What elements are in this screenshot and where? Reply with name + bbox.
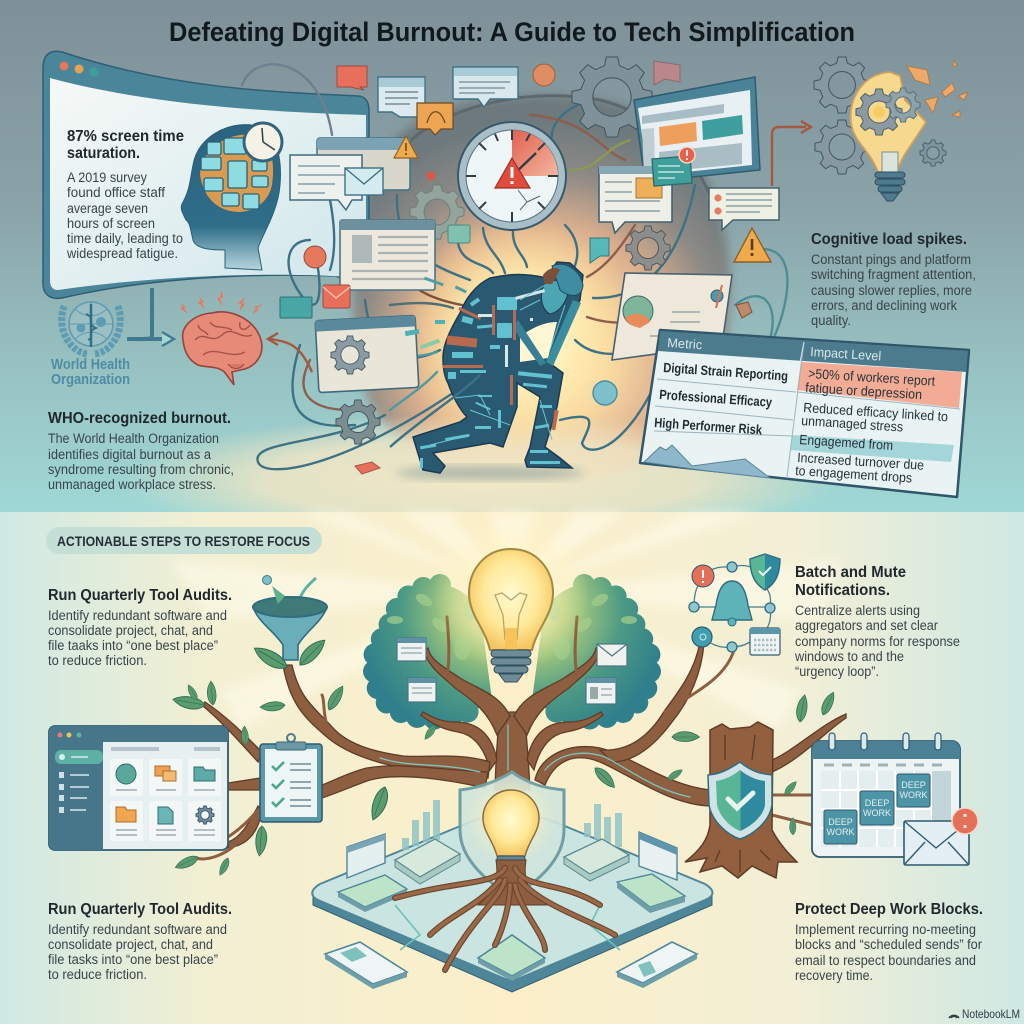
WHO wordmark: Organization — [51, 371, 130, 388]
background: warm ground glow — [120, 414, 840, 546]
browser monitor — [634, 77, 760, 182]
head — [541, 280, 568, 314]
heading and text: WHO-recognized burnout: WHO-recognized burnout. — [48, 410, 231, 427]
icon: funnel — [253, 576, 327, 660]
WHO wordmark: World Health — [51, 356, 130, 373]
table text: fatigue or depression — [805, 380, 923, 402]
table text: Metric — [667, 335, 703, 352]
alert badge — [952, 808, 978, 834]
table text: to engagement drops — [795, 463, 913, 486]
heading and text: run quarterly tool audits (top): consolidate project, chat, and — [48, 623, 213, 638]
table text: Increased turnover due — [797, 450, 924, 473]
shield with check — [708, 762, 772, 839]
mountain mini chart — [644, 445, 770, 478]
icon: deep work calendar with envelope: WORK — [900, 790, 928, 800]
illustration: isometric platform — [312, 814, 712, 992]
red cell — [797, 362, 962, 408]
platform cards — [325, 832, 697, 989]
figure shadow — [395, 466, 585, 480]
heading and text: batch and mute notifications: “urgency loop”. — [795, 664, 879, 679]
heading and text: protect deep work blocks — [795, 901, 983, 983]
red node — [426, 172, 436, 180]
wire crossing figure — [390, 375, 480, 447]
filament — [882, 152, 898, 172]
icon: World Health Organization emblem — [62, 302, 120, 354]
monitor screen — [50, 78, 366, 290]
heading and text: protect deep work blocks: blocks and “scheduled sends” for — [795, 937, 982, 952]
large gear — [572, 57, 652, 137]
table text: Impact Level — [810, 344, 882, 364]
table text: >50% of workers report — [808, 366, 936, 389]
heading and text: protect deep work blocks: Implement recurring no-meeting — [795, 922, 976, 937]
heading and text: run quarterly tool audits (bottom): file tasks into “one best place” — [48, 952, 218, 967]
illustration: foliage left — [373, 585, 492, 719]
dark arc behind clock — [385, 96, 710, 195]
red tag — [337, 66, 367, 90]
heading and text: protect deep work blocks: recovery time. — [795, 968, 873, 983]
stress bolts — [180, 290, 263, 314]
envelope — [904, 821, 969, 865]
background gear — [626, 226, 670, 270]
heading and text: run quarterly tool audits (bottom): to reduce friction. — [48, 967, 147, 982]
heading and text: WHO-recognized burnout: syndrome resulting from chronic, — [48, 462, 234, 477]
window — [317, 138, 410, 190]
heading and text: run quarterly tool audits (top): to reduce friction. — [48, 653, 147, 668]
circuit traces — [395, 905, 620, 950]
calendar grid — [821, 771, 951, 847]
figure: burnt-out person made of fragments — [390, 262, 583, 473]
table text: Professional Efficacy — [659, 387, 773, 410]
heading and text: run quarterly tool audits (bottom) — [48, 901, 232, 982]
heading and text: batch and mute notifications — [794, 564, 960, 679]
bubble — [378, 77, 425, 117]
stacked cards right — [564, 839, 629, 881]
heading and text: cognitive load spikes: quality. — [811, 313, 851, 328]
table text: Digital Strain Reporting — [663, 360, 789, 384]
header bars — [111, 747, 220, 751]
bulb base — [875, 172, 905, 201]
icon: deep work calendar with envelope: WORK — [863, 808, 891, 818]
card right — [617, 874, 685, 913]
table text — [654, 335, 948, 486]
heading and text: cognitive load spikes: Cognitive load spikes. — [811, 231, 967, 248]
screen stat text: saturation. — [67, 145, 140, 162]
screen stat text — [66, 128, 184, 261]
monitor frame — [43, 51, 369, 298]
heading and text: cognitive load spikes — [811, 231, 976, 328]
pink flag — [654, 61, 680, 85]
heading and text: run quarterly tool audits (bottom): Run Quarterly Tool Audits. — [48, 901, 232, 918]
table header — [658, 331, 968, 372]
window left — [347, 834, 385, 878]
heading and text: cognitive load spikes: Constant pings and platform — [811, 252, 971, 267]
deep work blocks: DEEP — [828, 817, 853, 827]
chip icon — [711, 285, 723, 308]
icon: stressed brain — [180, 290, 263, 385]
table text: unmanaged stress — [801, 413, 904, 435]
heading and text: batch and mute notifications: company norms for response — [795, 634, 960, 649]
icon: overload clock with warning — [458, 122, 566, 230]
circuit fragments — [420, 297, 560, 468]
screen stat text: A 2019 survey — [67, 170, 147, 185]
green badge — [448, 225, 470, 243]
teal card — [652, 156, 692, 186]
red badge — [679, 147, 695, 163]
deep work blocks — [824, 810, 857, 844]
red envelope — [323, 285, 350, 308]
panel: chaos cluster backdrop — [353, 95, 730, 480]
icon: head silhouette with app tiles — [181, 125, 280, 270]
speech bubble — [290, 155, 362, 210]
screen stat text: time daily, leading to — [67, 231, 183, 246]
orange alert bubble — [417, 103, 453, 135]
envelope — [345, 168, 383, 195]
heading and text: WHO-recognized burnout: The World Health Organization — [48, 431, 219, 446]
card bottom left — [325, 942, 407, 989]
arrow to bulb — [772, 121, 811, 186]
heading and text: cognitive load spikes: errors, and declining work — [811, 298, 957, 313]
heading and text: batch and mute notifications: windows to and the — [794, 649, 904, 664]
app tiles — [110, 759, 221, 841]
screen stat text: average seven — [67, 201, 148, 216]
heading and text: protect deep work blocks: Protect Deep Work Blocks. — [795, 901, 983, 918]
heading and text: WHO-recognized burnout: identifies digital burnout as a — [48, 447, 211, 462]
illustration: leaves — [172, 635, 837, 877]
flying fragments — [405, 277, 467, 349]
heading and text: run quarterly tool audits (top): Identify redundant software and — [48, 608, 227, 623]
background gear — [410, 185, 464, 239]
burst of light behind figure — [400, 215, 640, 455]
card bottom centre — [478, 935, 545, 981]
table body — [640, 330, 969, 497]
arm gap light — [520, 322, 557, 362]
heading and text: run quarterly tool audits (top): file taaks into “one best place” — [48, 638, 218, 653]
teal bubble — [590, 238, 609, 263]
heading and text: run quarterly tool audits (top): Run Quarterly Tool Audits. — [48, 587, 232, 604]
WHO wordmark — [51, 356, 130, 388]
table text: High Performer Risk — [654, 415, 763, 438]
hair brown tuft — [543, 268, 560, 284]
inner gear — [856, 89, 902, 135]
screen stat text: found office staff — [67, 185, 165, 200]
gears — [814, 57, 870, 113]
calendar rings — [829, 733, 941, 750]
window buttons — [60, 62, 98, 76]
icon: deep work calendar with envelope — [812, 733, 978, 865]
window dots — [58, 732, 82, 738]
hand on head — [552, 264, 583, 295]
orange node — [304, 246, 326, 268]
icon: dashboard window — [49, 726, 228, 850]
icon: small clock — [244, 123, 282, 161]
heading and text: batch and mute notifications: Notifications. — [795, 582, 890, 599]
speech bubble with envelope — [599, 168, 672, 233]
chart: bars right — [584, 804, 622, 847]
orange ball — [533, 64, 555, 86]
background: sun rays — [170, 512, 840, 730]
table text: Reduced efficacy linked to — [803, 400, 948, 424]
heading and text: batch and mute notifications: Batch and Mute — [795, 564, 906, 581]
chart: bars left — [402, 800, 440, 850]
heading and text: run quarterly tool audits (bottom): Identify redundant software and — [48, 922, 227, 937]
background: lower section — [0, 512, 1024, 1024]
grid lines — [654, 342, 960, 477]
heading and text: batch and mute notifications: Centralize alerts using — [795, 603, 920, 618]
table: impact metrics — [640, 330, 969, 497]
section pill: actionable steps — [46, 527, 322, 554]
gear window — [315, 315, 419, 393]
icon: big glowing bulb — [433, 515, 589, 682]
icon: small bulb — [466, 775, 556, 867]
teal circle — [593, 381, 617, 405]
screen stat text: widespread fatigue. — [66, 246, 178, 261]
title: Defeating Digital Burnout: A Guide to Tech Simplification — [169, 17, 855, 47]
screen stat text: hours of screen — [67, 216, 155, 231]
body silhouette — [413, 262, 583, 473]
screen stat text: 87% screen time — [67, 128, 184, 145]
knotted wire — [736, 302, 752, 318]
heading and text: cognitive load spikes: switching fragment attention, — [811, 267, 976, 282]
icons: foliage windows — [397, 638, 627, 704]
heading and text: batch and mute notifications: aggregators and set clear — [795, 618, 938, 633]
illustration: tree branches — [203, 642, 846, 848]
icon: bell notification network — [689, 554, 780, 655]
icon: clipboard checklist — [260, 734, 322, 822]
heading and text: protect deep work blocks: email to respect boundaries and — [795, 953, 976, 968]
heading and text: WHO-recognized burnout — [48, 410, 234, 492]
loose gear — [336, 400, 380, 444]
background: upper section — [0, 0, 1024, 512]
deep work blocks: WORK — [826, 827, 854, 837]
icon: broken lightbulb with gears — [814, 57, 968, 201]
illustration: foliage right — [532, 585, 651, 719]
shattered glass — [907, 60, 968, 117]
icon: tree stump with shield — [685, 722, 797, 878]
illustration: tree roots — [395, 860, 615, 970]
cluster: left app windows and alerts — [280, 66, 518, 474]
warning triangle — [394, 136, 418, 158]
icon: deep work calendar with envelope: DEEP — [865, 798, 889, 808]
bulb glass — [851, 72, 926, 172]
window right — [639, 832, 677, 880]
cluster: right app windows and alerts — [533, 57, 811, 405]
upper arm — [513, 320, 546, 366]
section pill: actionable steps: ACTIONABLE STEPS TO RESTORE FOCUS — [57, 533, 310, 549]
heading and text: WHO-recognized burnout: unmanaged workplace stress. — [48, 477, 216, 492]
arrow into brain — [268, 333, 312, 372]
forearm — [546, 300, 581, 366]
document window — [340, 220, 435, 290]
table text: Engagemed from — [799, 432, 894, 453]
icon: deep work calendar with envelope: DEEP — [901, 780, 926, 790]
teal tag — [280, 297, 312, 318]
sidebar menu — [55, 750, 103, 813]
note bubble — [709, 188, 779, 230]
heading and text: run quarterly tool audits (top) — [48, 587, 232, 668]
stacked cards left — [395, 839, 460, 884]
red fragment — [355, 462, 380, 474]
monitor stand and arrow — [127, 288, 168, 339]
illustration: thin twigs and sap lines — [190, 617, 815, 859]
warning triangle — [734, 228, 771, 262]
icon: glass shield — [460, 772, 564, 895]
browser window behind table — [612, 273, 732, 360]
card bottom right — [617, 942, 697, 988]
wires across cluster — [242, 64, 787, 469]
bubble top centre — [453, 67, 518, 107]
panel: curved monitor — [43, 51, 369, 346]
card left — [338, 875, 407, 912]
heading and text: cognitive load spikes: causing slower replies, more — [811, 283, 972, 298]
pie marker — [623, 296, 653, 328]
tile icons — [116, 764, 215, 824]
teal cell — [790, 435, 954, 462]
heading and text: run quarterly tool audits (bottom): consolidate project, chat, and — [48, 937, 213, 952]
